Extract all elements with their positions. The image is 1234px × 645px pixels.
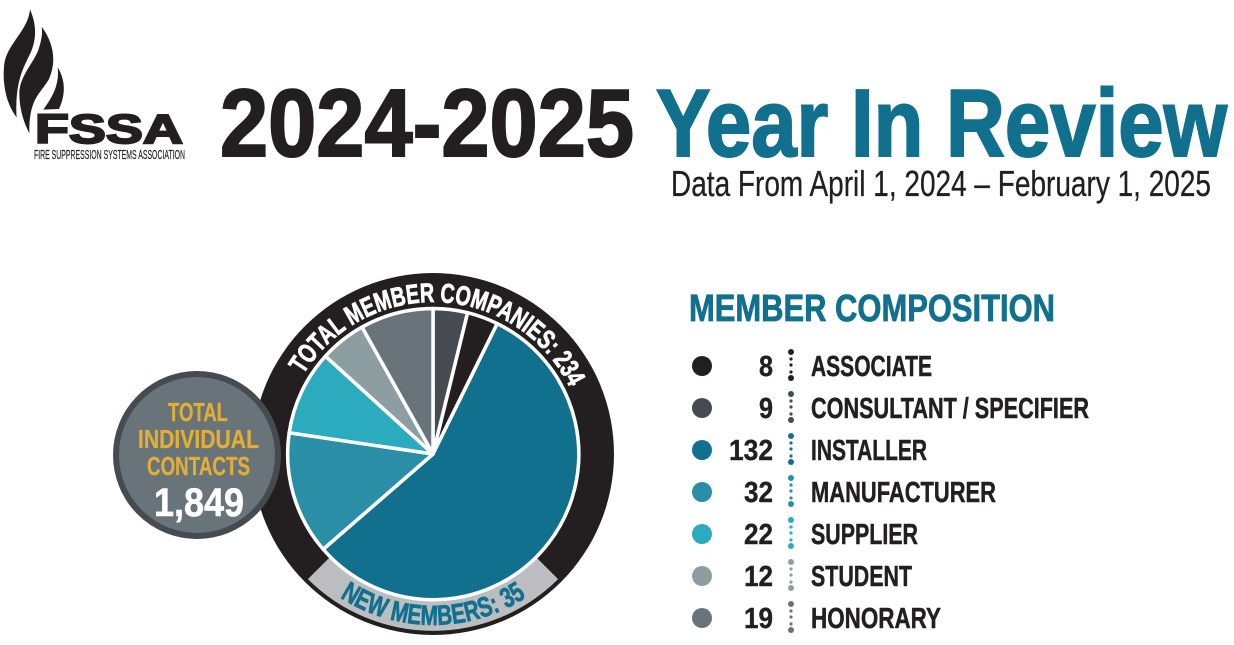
pie slices	[288, 309, 579, 600]
legend row: honorary: 19	[744, 603, 773, 635]
legend row: supplier: SUPPLIER	[811, 519, 918, 551]
legend row: associate: ASSOCIATE	[811, 351, 932, 383]
legend row: honorary: HONORARY	[811, 603, 941, 635]
legend row: installer: INSTALLER	[811, 435, 927, 467]
slice: student	[325, 327, 433, 454]
pie base outline	[286, 308, 580, 600]
legend row: manufacturer: 32	[744, 477, 773, 509]
callout value: 1,849	[154, 481, 244, 525]
title: years: 2024-2025	[220, 70, 634, 177]
legend row: consultant: 9	[759, 393, 773, 425]
legend row: installer: 132	[729, 435, 773, 467]
slice: installer	[323, 324, 579, 600]
callout label line 1: TOTAL	[168, 397, 228, 427]
icon: flames	[4, 9, 64, 133]
slice: honorary	[362, 309, 433, 454]
legend row: supplier	[692, 517, 918, 551]
curved label: total member companies: TOTAL MEMBER COMPANIES: 234	[287, 283, 586, 386]
slice: supplier	[289, 356, 433, 454]
legend: member composition	[692, 349, 1089, 635]
logo tagline: FIRE SUPPRESSION SYSTEMS ASSOCIATION	[34, 147, 185, 162]
legend row: installer	[692, 433, 927, 467]
legend row: student: STUDENT	[811, 561, 912, 593]
heading: member composition: MEMBER COMPOSITION	[689, 288, 1055, 330]
pie chart: total member companies	[260, 273, 614, 635]
legend row: manufacturer	[692, 475, 996, 509]
slice: associate	[433, 313, 497, 454]
callout label line 3: CONTACTS	[147, 451, 250, 481]
slice: consultant	[433, 309, 468, 454]
new members band	[308, 557, 558, 631]
legend row: associate: 8	[759, 351, 773, 383]
legend row: associate	[692, 349, 932, 383]
callout circle	[116, 374, 278, 536]
callout label line 2: INDIVIDUAL	[138, 424, 259, 454]
legend row: student: 12	[744, 561, 773, 593]
legend row: honorary	[692, 601, 941, 635]
callout: total individual contacts	[116, 374, 278, 536]
slice: manufacturer	[288, 433, 433, 549]
logo wordmark: FSSA	[35, 106, 183, 152]
legend row: supplier: 22	[744, 519, 773, 551]
legend row: consultant	[692, 391, 1089, 425]
outer black ring	[252, 273, 614, 635]
legend row: manufacturer: MANUFACTURER	[811, 477, 996, 509]
legend row: consultant: CONSULTANT / SPECIFIER	[811, 393, 1089, 425]
legend row: student	[692, 559, 912, 593]
curved label: new members: NEW MEMBERS: 35	[340, 581, 524, 626]
logo: FSSA	[4, 9, 185, 162]
